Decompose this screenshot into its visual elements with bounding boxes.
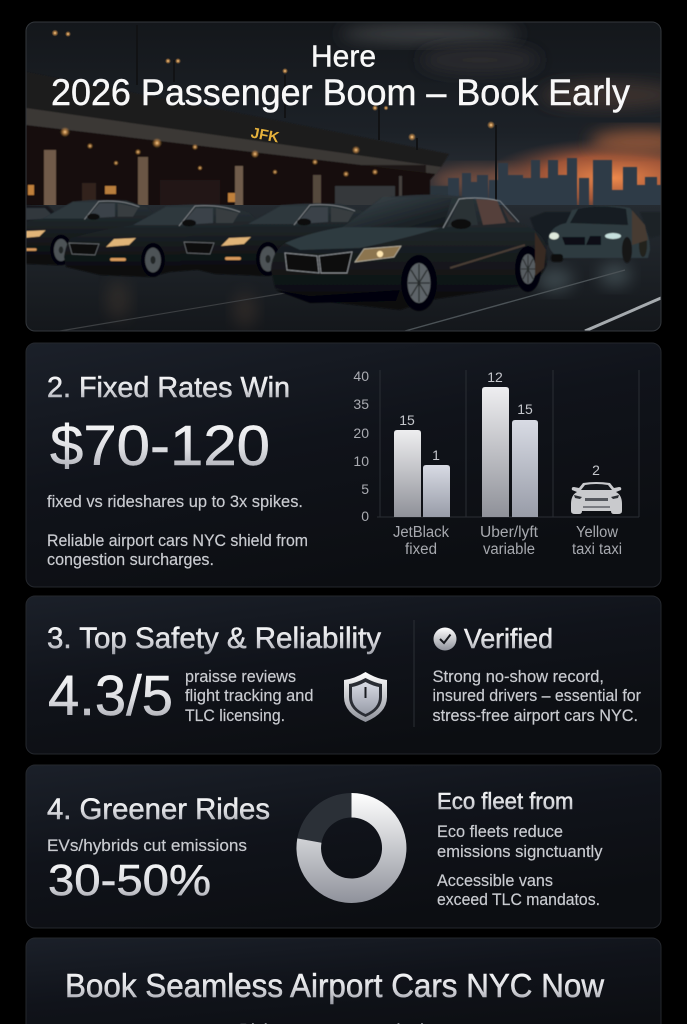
verified note: stress-free airport cars NYC. (432, 706, 638, 725)
big stat: rating: 4.3/5 (48, 664, 173, 728)
hero skyline (430, 157, 660, 205)
y axis labels: 0 (361, 508, 369, 524)
fixed vs rideshare note: fixed vs rideshares up to 3x spikes. (47, 493, 303, 511)
verified heading: Verified (464, 623, 553, 654)
bar value labels: 1 (432, 447, 440, 463)
big stat: price range: $70-120 (50, 414, 270, 478)
x axis labels (393, 524, 622, 558)
eco fleet heading: Eco fleet from (437, 788, 574, 814)
x axis labels: fixed (405, 541, 437, 558)
verified note: Strong no-show record, (432, 667, 604, 686)
reviews note: praisse reviews (185, 667, 296, 686)
accessible vans note: Accessible vans (437, 871, 553, 890)
hero ground (26, 205, 661, 331)
hero title: 2026 Passenger Boom – Book Early (51, 72, 630, 113)
y axis labels: 20 (353, 425, 369, 441)
bar value labels: 15 (517, 401, 533, 417)
accessible vans note: exceed TLC mandatos. (437, 890, 600, 909)
panel: call to action (26, 938, 661, 1024)
y axis labels: 40 (353, 368, 369, 384)
verified note (432, 667, 641, 725)
reviews note: TLC licensing. (185, 706, 285, 725)
surcharge note: congestion surcharges. (47, 551, 214, 569)
bar value labels (399, 369, 600, 478)
big stat: emissions cut: 30-50% (48, 856, 211, 905)
hero main car (271, 194, 547, 311)
hero JFK sign: JFK (249, 124, 281, 147)
surcharge note (47, 532, 308, 569)
bar chart (353, 368, 639, 558)
x axis labels: variable (483, 541, 535, 558)
icon: verified check (434, 628, 456, 650)
hero sky (26, 22, 660, 205)
panel: hero photo of JFK terminal with black cars (0, 22, 687, 331)
x axis labels: taxi taxi (572, 541, 622, 558)
bars (394, 387, 538, 517)
bar value labels: 15 (399, 412, 415, 428)
reviews note (185, 667, 314, 725)
hero title: Here (311, 38, 376, 74)
icon: taxi car (571, 482, 622, 514)
eco fleet note: emissions signctuantly (437, 842, 603, 861)
bar value labels: 2 (592, 462, 600, 478)
heading: book now: Book Seamless Airport Cars NYC Now (65, 967, 604, 1004)
bar value labels: 12 (487, 369, 503, 385)
hero lamp posts (52, 25, 496, 200)
hero terminal building (26, 72, 449, 207)
y axis labels: 5 (361, 481, 369, 497)
y axis labels: 10 (353, 453, 369, 469)
x axis labels: JetBlack (393, 524, 449, 541)
x axis labels: Uber/lyft (480, 524, 539, 541)
y axis labels: 35 (353, 396, 369, 412)
hero title (51, 38, 630, 113)
panel: fixed rates (26, 343, 661, 587)
surcharge note: Reliable airport cars NYC shield from (47, 532, 308, 550)
heading: greener rides: 4. Greener Rides (47, 793, 270, 826)
icon: shield (344, 672, 387, 722)
heading: fixed rates win: 2. Fixed Rates Win (47, 372, 290, 404)
y axis labels (353, 368, 369, 524)
heading: top safety: 3. Top Safety & Reliability (47, 622, 381, 655)
eco fleet note: Eco fleets reduce (437, 822, 563, 841)
reviews note: flight tracking and (185, 686, 314, 705)
verified note: insured drivers – essential for (432, 686, 641, 705)
hero right front-facing car (548, 206, 650, 263)
panel: greener rides (26, 765, 661, 928)
x axis labels: Yellow (576, 524, 619, 541)
eco fleet note (437, 822, 603, 861)
emissions note: EVs/hybrids cut emissions (47, 836, 247, 855)
panel: safety and reliability (26, 596, 661, 754)
donut chart (296, 793, 406, 903)
hero background cars (0, 200, 661, 277)
accessible vans note (437, 871, 600, 909)
